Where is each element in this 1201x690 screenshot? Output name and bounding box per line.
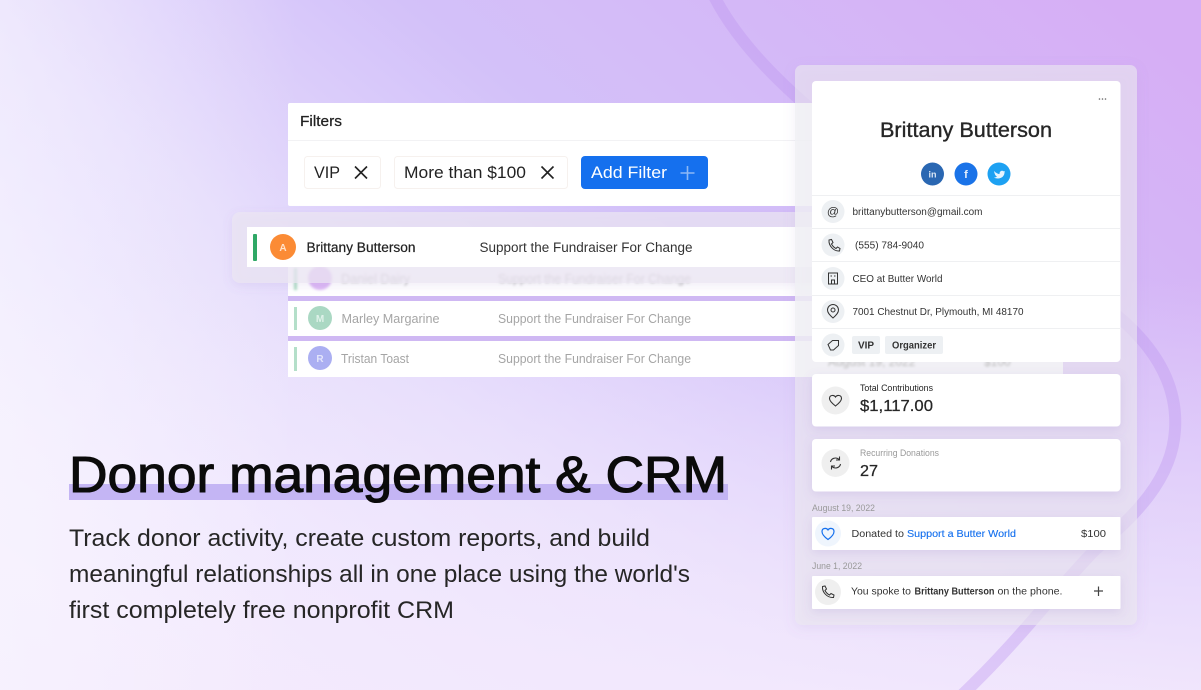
description text	[69, 525, 690, 624]
blurred text behind profile	[828, 355, 1011, 369]
card: recurring donations: Recurring Donations	[860, 448, 939, 458]
button: Add Filter: Add Filter	[591, 163, 667, 182]
row: email	[822, 200, 982, 223]
description text: first completely free nonprofit CRM	[69, 597, 454, 624]
activity: phone call: Brittany Butterson	[914, 586, 994, 598]
panel: highlighted donor glass card	[232, 212, 1072, 283]
row: Daniel Dairy	[288, 262, 1063, 296]
row: address: 7001 Chestnut Dr, Plymouth, MI 48170	[852, 307, 1024, 318]
row: tags: VIP	[858, 340, 874, 352]
row: Tristan Toast: Support the Fundraiser For Change	[498, 351, 691, 366]
chip: More than $100	[394, 156, 568, 188]
chip: VIP	[304, 156, 380, 188]
row: Brittany Butterson: Brittany Butterson	[306, 240, 416, 255]
activity: phone call: on the phone.	[998, 586, 1062, 598]
heading: Filters: Filters	[300, 113, 342, 130]
activity: phone call	[812, 576, 1120, 609]
row: Tristan Toast: Tristan Toast	[341, 351, 409, 366]
row: Daniel Dairy: Daniel Dairy	[341, 271, 410, 286]
panel: filters	[288, 103, 1063, 206]
decorative curved band	[712, 0, 1175, 690]
activity: donated: $100	[1081, 529, 1106, 540]
row: job	[822, 267, 942, 290]
row: Marley Margarine: M	[316, 314, 324, 325]
icon: linkedin	[921, 162, 944, 186]
row: job: CEO at Butter World	[852, 274, 942, 285]
row: phone: (555) 784-9040	[855, 240, 924, 252]
description text: meaningful relationships all in one place using the world's	[69, 561, 690, 588]
date: August 19: August 19, 2022	[812, 503, 875, 513]
row: tags	[822, 334, 943, 356]
heading: name: Brittany Butterson	[880, 119, 1052, 142]
row: phone	[822, 234, 924, 256]
activity: phone call: You spoke to	[851, 586, 911, 598]
row: tags: Organizer	[892, 340, 936, 352]
card: recurring donations	[812, 439, 1120, 492]
glass frost over list	[795, 103, 1063, 377]
avatar	[270, 234, 296, 260]
row: Tristan Toast	[288, 341, 1063, 377]
icon: linkedin: in	[928, 170, 936, 180]
row: email: @	[827, 204, 839, 218]
card: total contributions: $1,117.00	[860, 398, 933, 415]
row: Daniel Dairy: Support the Fundraiser For Change	[498, 271, 691, 286]
card: profile details	[812, 81, 1120, 362]
row: Marley Margarine: Marley Margarine	[342, 311, 440, 326]
blurred text behind profile: August 19, 2022	[828, 355, 916, 369]
row: Brittany Butterson	[247, 227, 1072, 267]
icon: facebook: f	[964, 169, 968, 181]
card: total contributions	[812, 374, 1120, 426]
icon: twitter	[988, 162, 1010, 186]
avatar: A	[279, 243, 287, 254]
title with highlight: Donor management & CRM	[69, 446, 727, 503]
row: Tristan Toast: R	[316, 354, 324, 365]
icon: facebook	[954, 162, 978, 186]
panel: donor profile glass	[795, 65, 1137, 625]
chip: VIP: VIP	[314, 163, 340, 182]
button: Add Filter	[581, 156, 708, 189]
activity: donated: Donated to	[852, 529, 904, 540]
description text: Track donor activity, create custom reports, and build	[69, 525, 650, 552]
chip: More than $100: More than $100	[404, 163, 526, 182]
row: Brittany Butterson: Support the Fundraiser For Change	[480, 240, 692, 255]
row: email: brittanybutterson@gmail.com	[852, 207, 982, 218]
panel: donor list behind	[288, 262, 1063, 377]
row: Marley Margarine: Support the Fundraiser For Change	[498, 311, 691, 326]
card: recurring donations: 27	[860, 463, 878, 480]
blurred text behind profile: $100	[984, 355, 1011, 369]
card: total contributions: Total Contributions	[860, 383, 933, 393]
activity: donated	[812, 517, 1120, 550]
row: Marley Margarine	[288, 301, 1063, 336]
date: June 1: June 1, 2022	[812, 561, 862, 571]
menu dots	[1099, 98, 1106, 100]
row: address	[822, 300, 1024, 323]
activity: donated: Support a Butter World	[907, 529, 1016, 540]
